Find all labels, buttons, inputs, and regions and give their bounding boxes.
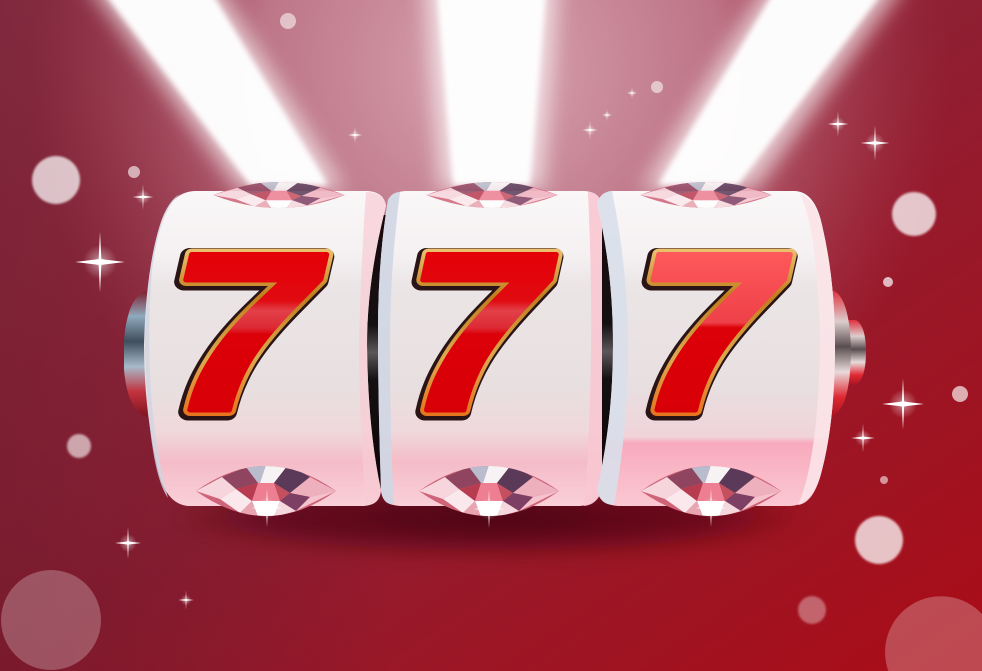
seven 2: 7 bbox=[405, 206, 556, 458]
reel 1 bbox=[144, 181, 386, 517]
reel 2 bbox=[378, 181, 602, 517]
diamond sparkles bbox=[251, 489, 727, 528]
diamond top 1 bbox=[213, 181, 345, 209]
diamond bottom 2 bbox=[419, 465, 559, 517]
seven 3: 7 bbox=[633, 208, 788, 460]
reel shadow bbox=[170, 480, 810, 556]
right axle cap bbox=[832, 290, 866, 416]
diamond top 3 bbox=[640, 181, 772, 209]
seven 3: 7 bbox=[635, 206, 790, 458]
sparkles bbox=[75, 87, 924, 610]
seven 2: 7 bbox=[405, 206, 556, 458]
light rays bbox=[84, 0, 908, 190]
seven 2: 7 bbox=[403, 208, 554, 460]
seven 1: 7 bbox=[168, 206, 327, 458]
seven 1: 7 bbox=[166, 208, 325, 460]
reel 3 bbox=[597, 181, 835, 517]
diamond top 2 bbox=[426, 181, 558, 209]
seven 3: 7 bbox=[635, 206, 790, 458]
gaps between reels bbox=[362, 213, 620, 490]
diamond bottom 1 bbox=[196, 465, 336, 517]
diamond bottom 3 bbox=[641, 465, 781, 517]
left axle cap bbox=[124, 291, 147, 417]
seven 1: 7 bbox=[168, 206, 327, 458]
